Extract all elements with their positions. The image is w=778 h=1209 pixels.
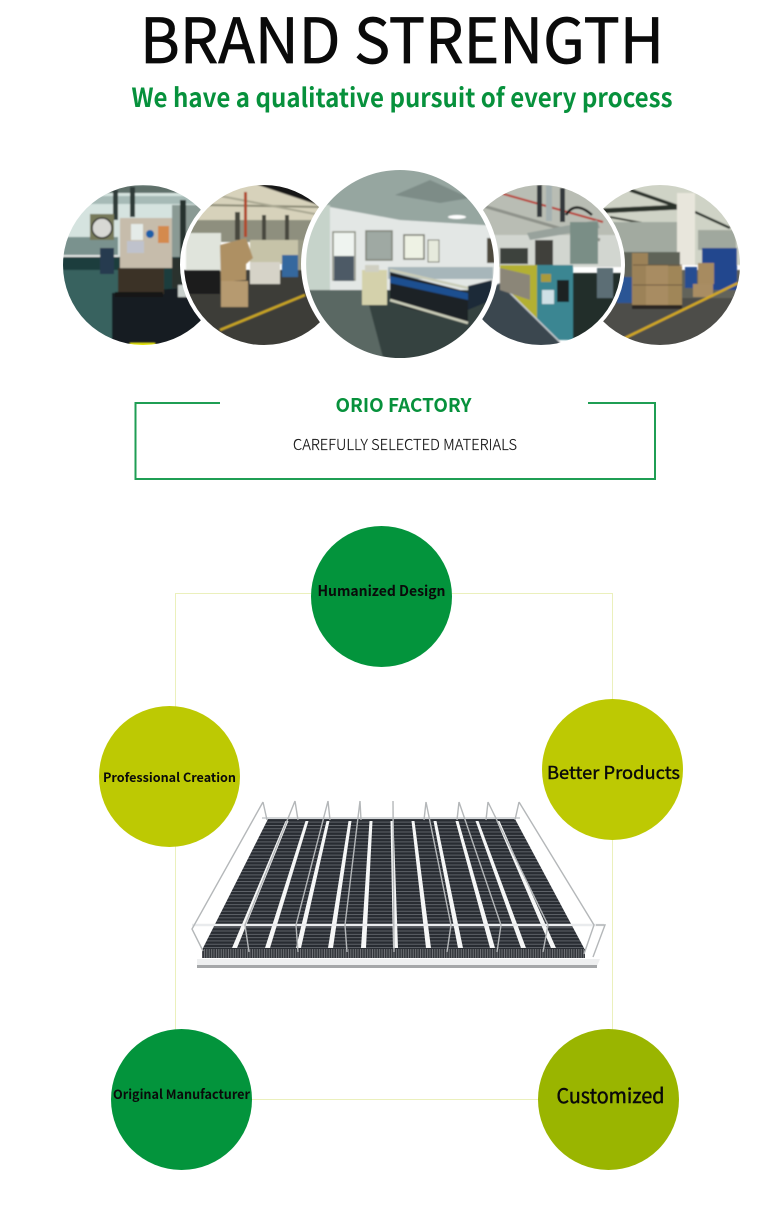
photo ring: fourth circle <box>457 181 625 349</box>
grate front teeth <box>202 949 585 958</box>
photo: warehouse with pallets <box>603 185 740 345</box>
subtitle: We have a qualitative pursuit of every process <box>132 78 672 115</box>
back rail <box>262 817 520 819</box>
photo ring: centre circle <box>301 165 499 363</box>
photo: factory machine room <box>63 185 201 345</box>
panel text: CAREFULLY SELECTED MATERIALS <box>293 434 517 455</box>
feature: Humanized Design: Humanized Design <box>318 580 446 601</box>
connector frame <box>176 594 612 1100</box>
feature: Professional Creation <box>99 706 240 847</box>
feature: Better Products: Better Products <box>547 760 680 785</box>
feature: Original Manufacturer: Original Manufacturer <box>113 1084 250 1103</box>
feature: Original Manufacturer <box>111 1029 252 1170</box>
feature: Better Products <box>542 699 683 840</box>
feature: Customized: Customized <box>556 1080 664 1109</box>
photo: injection moulding machine <box>482 185 621 345</box>
photo: production floor with cartons <box>184 185 320 345</box>
grate deck <box>202 819 585 950</box>
feature: Customized <box>538 1029 679 1170</box>
panel frame <box>136 403 655 479</box>
white base rail <box>197 959 600 966</box>
feature: Professional Creation: Professional Creation <box>103 767 236 786</box>
wire dividers <box>192 801 605 957</box>
panel heading: ORIO FACTORY <box>336 391 472 418</box>
factory photo strip <box>60 165 745 365</box>
panel: Orio Factory <box>136 391 655 479</box>
feature: Humanized Design <box>311 526 452 667</box>
photo ring: second circle <box>180 181 348 349</box>
white divider rails <box>232 821 556 948</box>
product: wire shelf roller grate <box>192 801 605 968</box>
photo: clean office room <box>306 170 494 358</box>
clear front bar <box>192 924 604 926</box>
